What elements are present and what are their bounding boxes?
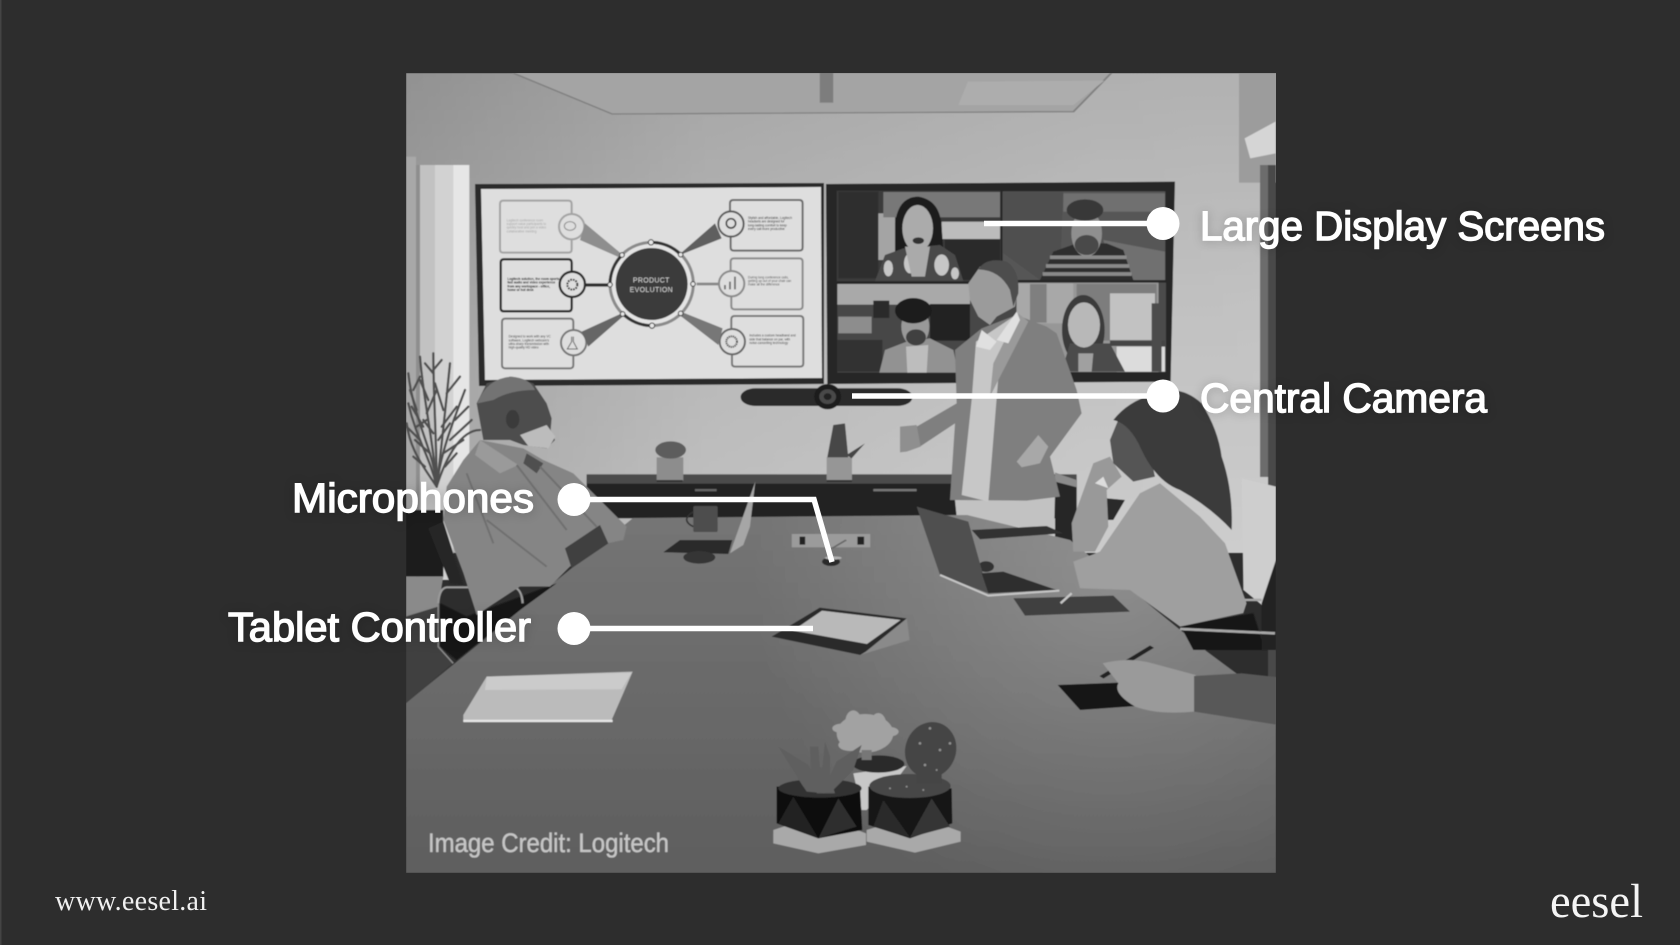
right laptop xyxy=(917,507,1059,596)
slide diagram xyxy=(500,200,803,368)
open notebook xyxy=(463,672,633,722)
slide body text: home or hot desk xyxy=(507,288,534,292)
image credit: Image Credit: Logitech xyxy=(428,828,669,858)
right tablet xyxy=(972,526,1063,539)
phone and hand xyxy=(1058,647,1278,725)
sideboard xyxy=(587,474,1077,518)
slide body text: from any workspace - office, xyxy=(507,284,550,288)
tablet controller xyxy=(772,608,910,655)
wall plant xyxy=(407,353,480,487)
slide body text: collaborative meeting xyxy=(507,229,537,233)
slide body text: high-quality HD video xyxy=(509,346,539,350)
cable port xyxy=(792,534,870,548)
slide body text xyxy=(507,216,796,350)
slide body text: Designed to work with any VC xyxy=(509,335,551,339)
presenter xyxy=(900,260,1082,547)
video participants xyxy=(875,197,1133,373)
slide body text: Logitech solution, the room sports xyxy=(507,277,560,281)
slide body text: ultra-sharp transmission with xyxy=(509,342,549,346)
slide body text: Stylish and affordable, Logitech xyxy=(748,216,792,220)
dark notebook xyxy=(1013,593,1130,616)
woman seated right xyxy=(1072,390,1276,650)
callout: microphones: Microphones xyxy=(292,475,534,521)
slide body text: every call more productive xyxy=(748,227,785,231)
camera bar xyxy=(741,384,912,409)
sideboard plants xyxy=(655,423,865,482)
slide body text: fast audio and video experience xyxy=(507,281,555,285)
callout: tablet controller: Tablet Controller xyxy=(228,604,531,650)
aloe xyxy=(799,745,862,794)
slide title: PRODUCT xyxy=(633,278,670,285)
slide body text: software, Logitech webcam's xyxy=(509,338,550,342)
potted succulents xyxy=(773,710,964,853)
callout: central camera xyxy=(852,375,1487,421)
left window xyxy=(406,157,469,580)
slide icons xyxy=(564,219,737,349)
eesel logo: eesel xyxy=(1550,875,1643,928)
slide body text: Includes a custom headband and xyxy=(749,334,796,338)
man seated left xyxy=(443,377,627,615)
slide body text: make all the difference xyxy=(748,283,780,287)
slide body text: support value participants to xyxy=(507,222,546,226)
table xyxy=(406,515,1276,873)
right display screen: video call xyxy=(826,182,1175,384)
call backgrounds xyxy=(837,192,1165,372)
mug xyxy=(687,506,718,532)
slide diagram: EVOLUTION xyxy=(630,287,673,294)
callout: large display screens xyxy=(984,203,1605,249)
wall and ceiling xyxy=(406,73,1278,680)
slide body text: noise-cancelling technology xyxy=(749,341,789,345)
slide body text: During long conference calls, xyxy=(748,275,789,279)
slide body text: side that balance on par, with xyxy=(749,337,790,341)
table items xyxy=(463,482,755,722)
left chair and floor xyxy=(406,510,557,703)
callout: large display screens: Large Display Screens xyxy=(1200,203,1605,249)
slide body text: getting up out of your chair can xyxy=(748,279,792,283)
rosette succulent xyxy=(832,710,899,760)
cactus xyxy=(904,722,957,778)
left display screen xyxy=(475,183,824,386)
slide body text: long-lasting comfort to keep xyxy=(748,223,787,227)
conference room photo xyxy=(406,73,1278,873)
slide body text: quickly host and join a video xyxy=(507,226,546,230)
callout: tablet controller xyxy=(228,604,813,650)
slide body text: headsets are designed for xyxy=(748,220,784,224)
slide body text: Logitech conference room xyxy=(507,218,544,222)
microphone xyxy=(822,556,842,566)
website url: www.eesel.ai xyxy=(55,886,207,917)
left laptop xyxy=(663,482,755,564)
callout: microphones xyxy=(292,475,832,562)
callout: central camera: Central Camera xyxy=(1200,375,1487,421)
